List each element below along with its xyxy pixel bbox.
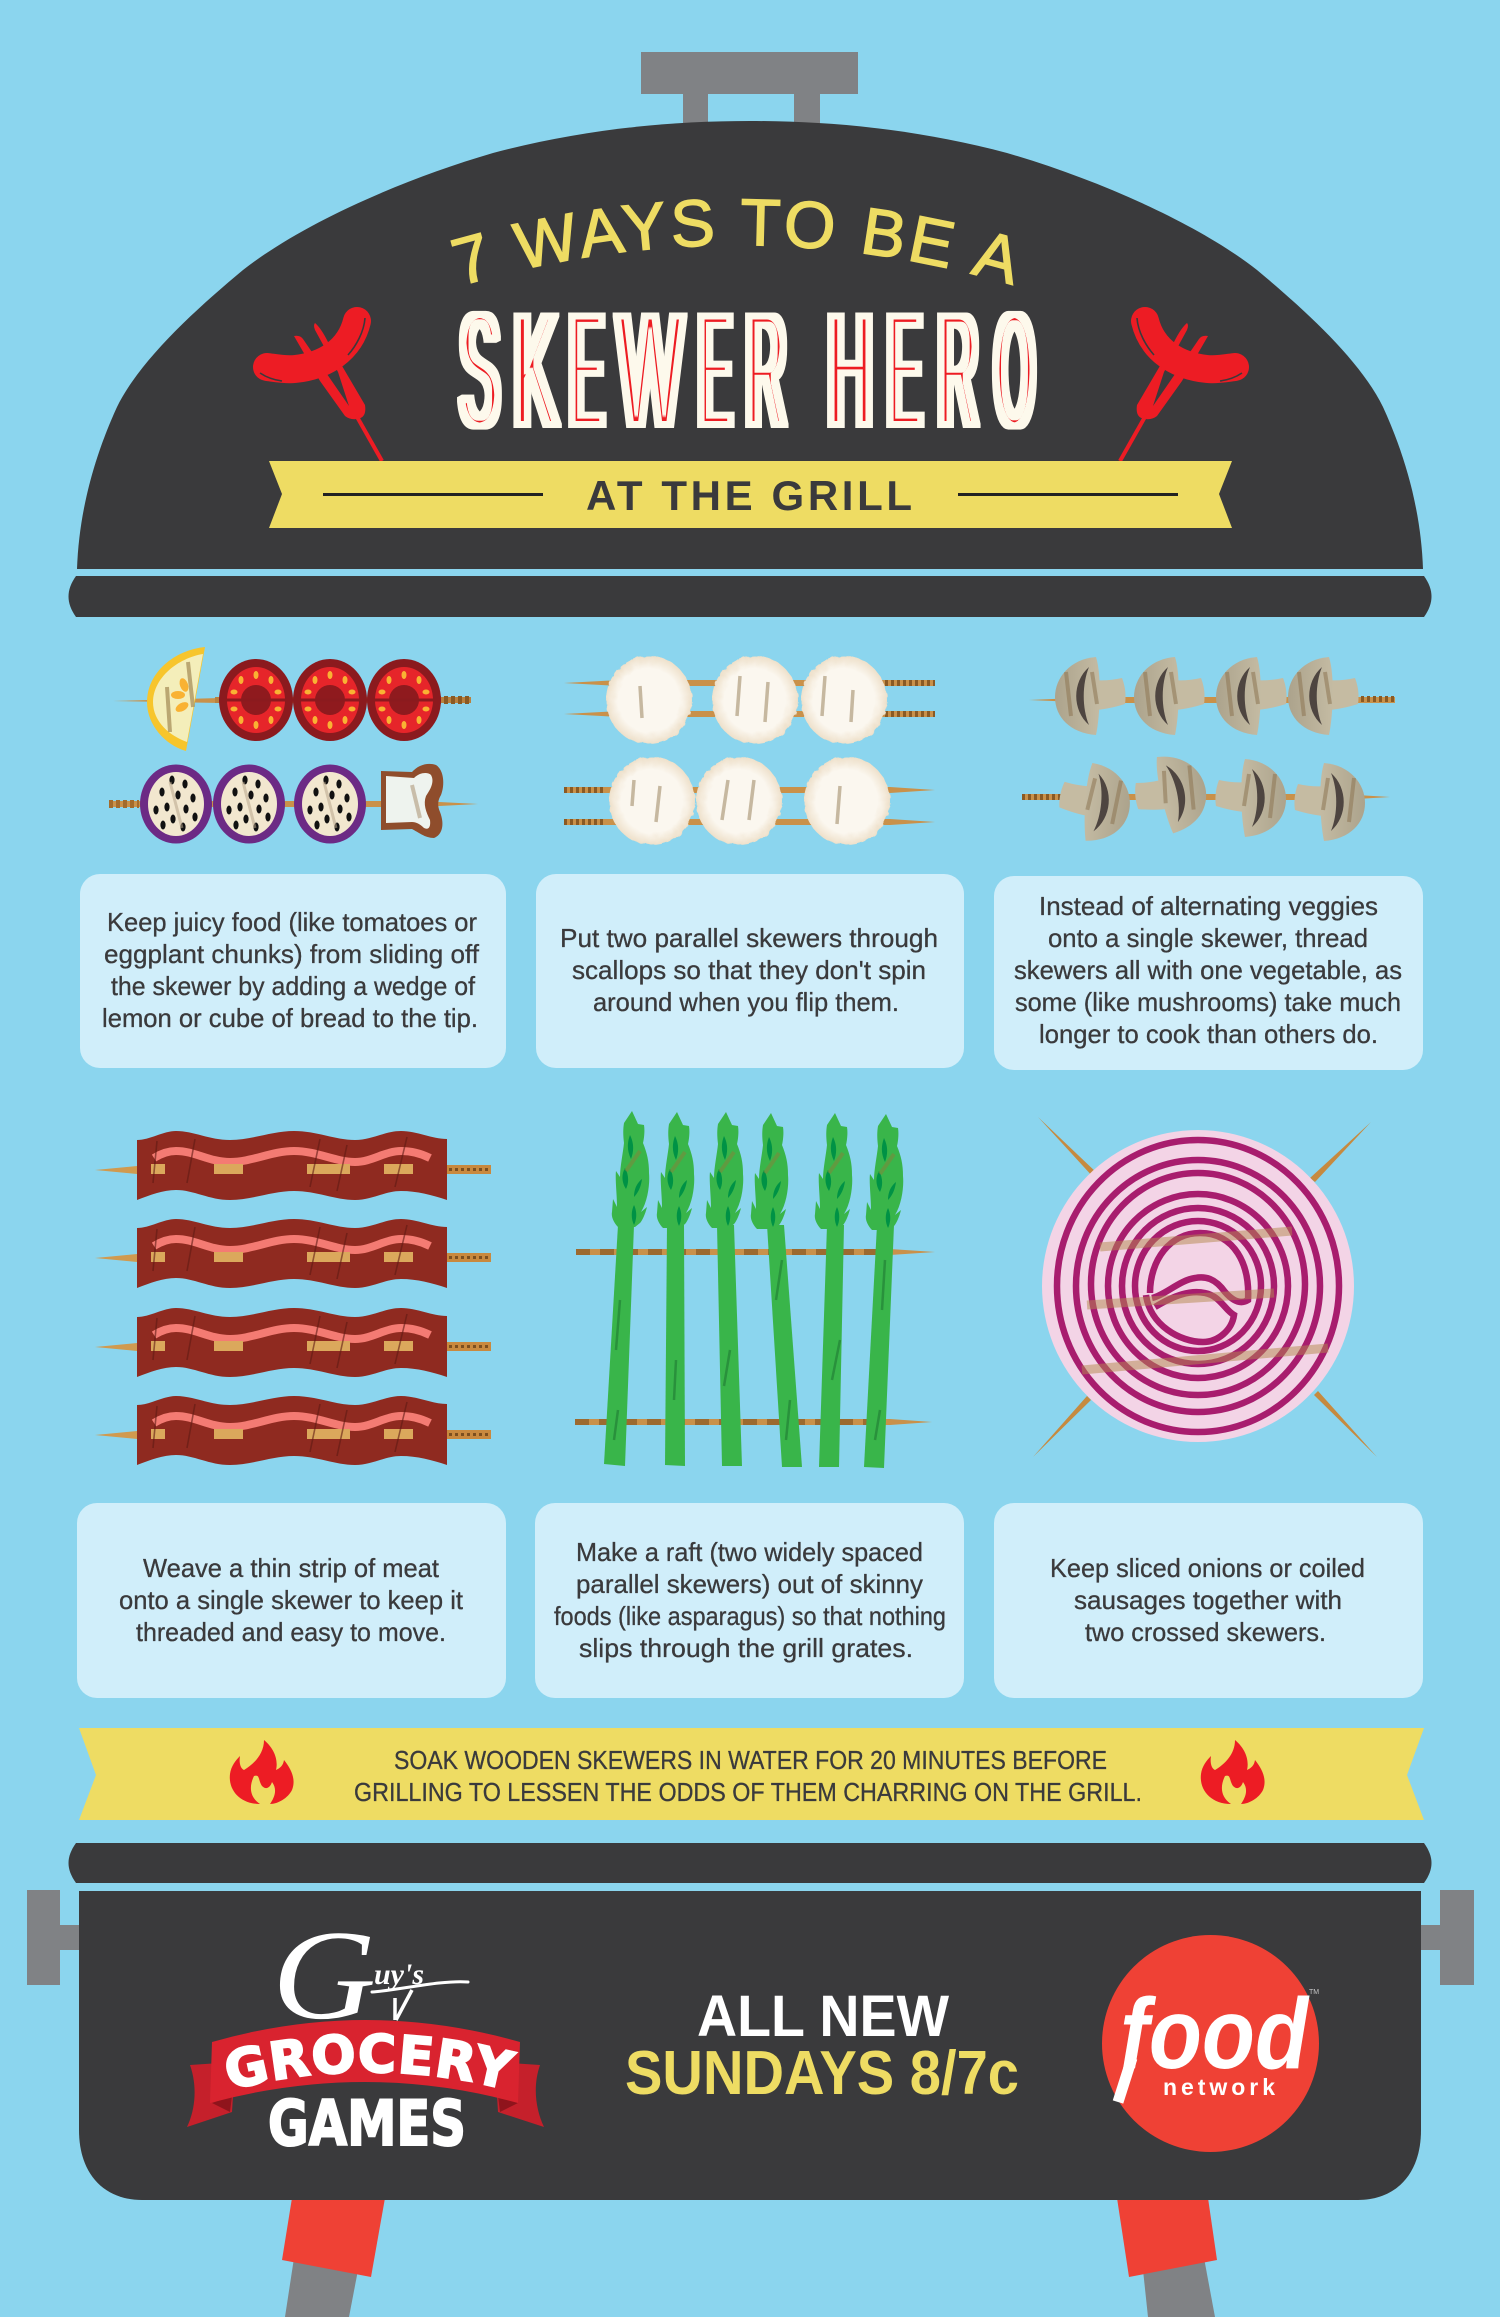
title: skewer hero: E (888, 280, 921, 461)
script wordmark: Guy's: G (272, 1904, 376, 2046)
title: skewer hero: W (618, 280, 682, 461)
illustration: onion with crossed skewers (1033, 1117, 1377, 1457)
title: skewer hero (460, 280, 1033, 461)
tip card 1: eggplant chunks) from sliding off (104, 939, 480, 969)
air time: ALL NEW (697, 1984, 949, 2049)
eggplant slices (140, 764, 366, 844)
tip card 1: Keep juicy food (like tomatoes or (107, 907, 477, 937)
title: skewer hero: R (939, 280, 977, 461)
banner: soak wooden skewers (79, 1728, 1424, 1820)
icon: sausage on fork, left (260, 318, 382, 461)
tip card 4 (77, 1503, 506, 1698)
tip card 2: around when you flip them. (593, 987, 899, 1017)
leg left (282, 2198, 385, 2317)
tip card 3: skewers all with one vegetable, as (1014, 955, 1402, 985)
tip card 5: Make a raft (two widely spaced (576, 1537, 923, 1567)
tip card 3 (994, 876, 1423, 1070)
grill lid handle (641, 52, 858, 128)
tip card 3: longer to cook than others do. (1039, 1019, 1378, 1049)
tip card 6: sausages together with (1074, 1585, 1342, 1615)
tip card 1: lemon or cube of bread to the tip. (102, 1003, 478, 1033)
tip card 2 (536, 874, 964, 1068)
lemon wedge (147, 647, 205, 751)
grill lid rim (68, 576, 1432, 617)
title: skewer hero: E (699, 280, 731, 461)
title: skewer hero: K (514, 280, 557, 461)
tomato slices (219, 659, 441, 741)
tip card 2: Put two parallel skewers through (560, 923, 938, 953)
side handle right (1420, 1890, 1474, 1985)
tip card 6: two crossed skewers. (1085, 1617, 1326, 1647)
text: O (996, 280, 1033, 461)
logo: Guy's Grocery Games (187, 1904, 544, 2160)
air time (625, 1984, 1019, 2108)
tip card 4: onto a single skewer to keep it (119, 1585, 464, 1615)
logo: food network: food (1120, 1978, 1310, 2090)
tip card 5: slips through the grill grates. (579, 1633, 913, 1663)
tip card 6 (994, 1503, 1423, 1698)
logo: food network: TM (1309, 1989, 1319, 1996)
illustration: bacon skewers (95, 1131, 491, 1465)
script wordmark: Guy's (272, 1904, 468, 2046)
banner: at the grill (269, 461, 1232, 528)
title: skewer hero: E (570, 280, 603, 461)
title: skewer hero: H (828, 280, 872, 461)
icon: sausage on fork, right (1120, 318, 1242, 461)
icon: flame left (230, 1740, 294, 1804)
illustration: asparagus raft (575, 1111, 935, 1468)
title: skewer hero: S (460, 280, 498, 461)
title: skewer hero: E (888, 280, 921, 461)
title: skewer hero: W (618, 280, 682, 461)
script wordmark: Guy's: uy's (374, 1958, 424, 1991)
title: skewer hero: H (828, 280, 872, 461)
title: skewer hero: R (939, 280, 977, 461)
tip card 4: Weave a thin strip of meat (143, 1553, 440, 1583)
grill lid dome (77, 121, 1423, 569)
grill body (79, 1891, 1421, 2200)
tip card 3: onto a single skewer, thread (1048, 923, 1368, 953)
banner: soak wooden skewers: SOAK WOODEN SKEWERS IN WATER FOR 20 MINUTES BEFORE (394, 1745, 1107, 1775)
grill base rim (68, 1843, 1432, 1883)
tip card 4: threaded and easy to move. (136, 1617, 446, 1647)
title: skewer hero: K (514, 280, 557, 461)
banner: soak wooden skewers: GRILLING TO LESSEN THE ODDS OF THEM CHARRING ON THE GRILL. (354, 1777, 1142, 1807)
title line: 7 ways to be a: 7 WAYS TO BE A (450, 198, 1014, 286)
text: O (996, 280, 1033, 461)
tip card 2: scallops so that they don't spin (572, 955, 926, 985)
ribbon (187, 2020, 544, 2127)
side handle left (27, 1890, 80, 1985)
air time: SUNDAYS 8/7c (625, 2039, 1019, 2108)
title: skewer hero: E (570, 280, 603, 461)
leg right (1117, 2198, 1217, 2317)
illustration: scallop skewers (564, 656, 935, 845)
games wordmark: GAMES (268, 2087, 466, 2160)
illustration: mushroom skewers (1022, 657, 1395, 844)
tip card 5: parallel skewers) out of skinny (576, 1569, 923, 1599)
tip card 5 (535, 1503, 964, 1698)
logo: food network: network (1163, 2074, 1275, 2100)
bread cube (381, 764, 443, 838)
illustration: tomato and eggplant skewers (109, 647, 478, 844)
title: skewer hero: E (699, 280, 731, 461)
banner: at the grill: AT THE GRILL (586, 472, 912, 519)
tip card 1 (80, 874, 506, 1068)
grocery wordmark: GROCERY (226, 2032, 518, 2088)
title: skewer hero: R (747, 280, 785, 461)
tip card 3: some (like mushrooms) take much (1015, 987, 1401, 1017)
title: skewer hero: S (460, 280, 498, 461)
tip card 6: Keep sliced onions or coiled (1050, 1553, 1365, 1583)
logo: food network (1102, 1935, 1319, 2152)
tip card 3: Instead of alternating veggies (1039, 891, 1378, 921)
tip card 1: the skewer by adding a wedge of (111, 971, 476, 1001)
icon: flame right (1201, 1740, 1265, 1804)
tip card 5: foods (like asparagus) so that nothing (554, 1601, 946, 1631)
title: skewer hero: R (747, 280, 785, 461)
